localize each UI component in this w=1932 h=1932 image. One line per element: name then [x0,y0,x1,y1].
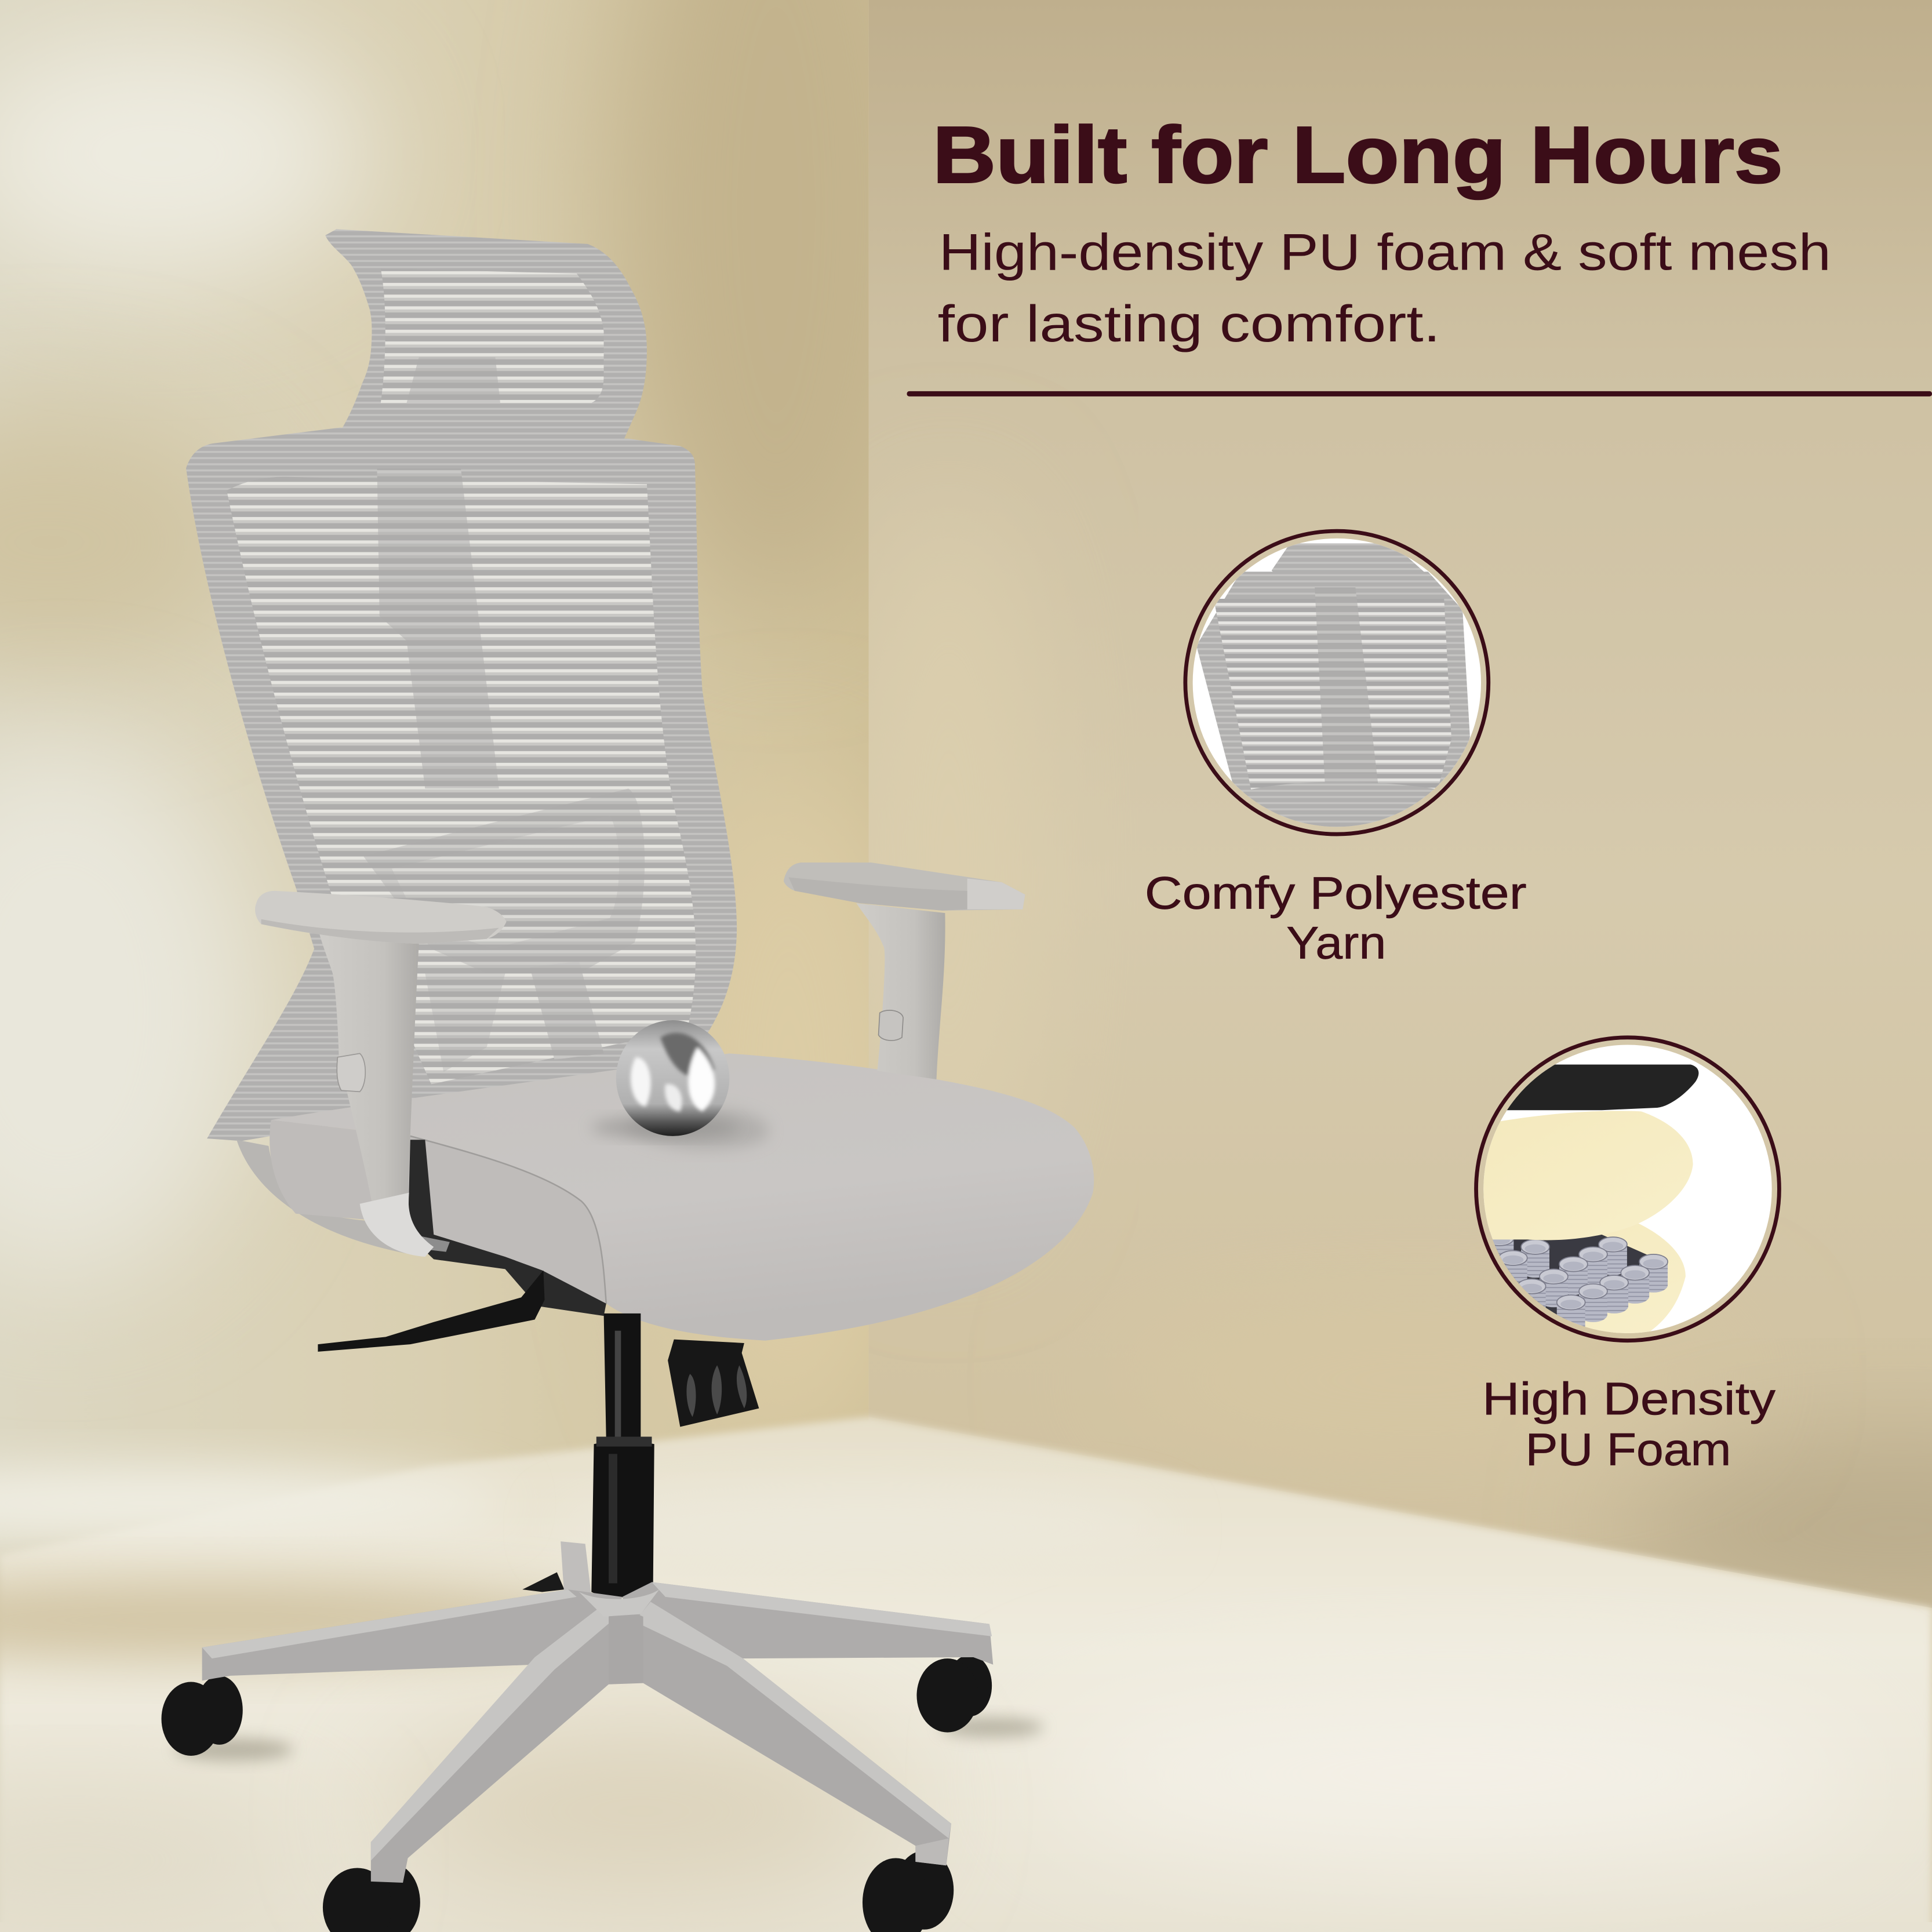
headrest [325,229,647,446]
header divider [907,391,1932,396]
left armrest [255,891,507,1257]
gas lift column [591,1314,654,1598]
chrome ball [591,1020,739,1138]
hub [579,1589,659,1617]
upper yellow foam [1467,1111,1693,1240]
seat cushion [270,1053,1094,1341]
circular detail: mesh close-up [1185,531,1489,850]
back shell lower wing [207,949,431,1141]
top black foam layer [1479,1065,1698,1115]
under-seat mechanism [408,1140,606,1316]
caster shadows [175,1718,1043,1761]
label: high density PU foam: High Density [1482,1373,1776,1424]
label: high density PU foam: PU Foam [1526,1424,1731,1475]
label: comfy polyester yarn [1145,868,1527,969]
title: Built for Long Hours [933,111,1783,200]
label: comfy polyester yarn: Comfy Polyester [1145,868,1527,919]
feature: comfy polyester yarn [1145,531,1527,969]
back caster [522,1572,565,1592]
mesh backrest [186,428,737,1100]
front-right arm [628,1608,951,1865]
casters [161,1655,992,1932]
label: high density PU foam [1482,1373,1776,1475]
label: comfy polyester yarn: Yarn [1286,918,1386,969]
pocket springs [1485,1231,1668,1333]
right arm [622,1582,993,1665]
tilt knob [668,1340,759,1427]
seat back shell under seat [237,1140,425,1257]
front-left arm [371,1614,611,1883]
left arm [202,1589,622,1680]
five-star base [202,1541,993,1883]
seat height lever [318,1271,545,1352]
subtitle [938,223,1831,352]
lower foam [1467,1224,1686,1336]
right armrest [784,863,1025,1079]
circular detail: foam layers [1467,1038,1779,1341]
subtitle line 2: for lasting comfort. [938,294,1440,352]
subtitle line 1: High-density PU foam & soft mesh [939,223,1831,281]
feature: high density PU foam [1467,1038,1779,1475]
back arm [561,1541,591,1597]
office chair [161,229,1094,1932]
center spine [609,1608,643,1684]
